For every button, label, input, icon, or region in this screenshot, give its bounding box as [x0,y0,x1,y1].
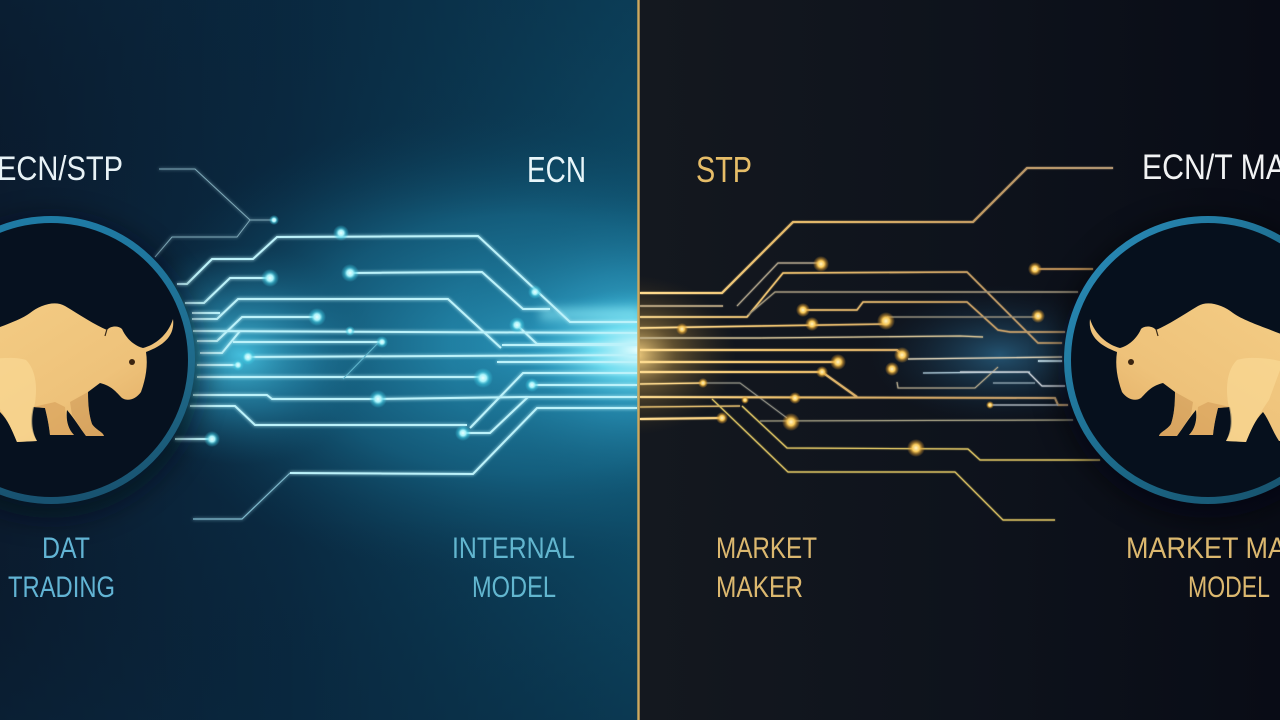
panel: right dark background [640,0,1070,720]
label: DAT TRADING: DAT [42,532,90,565]
right circle badge with bull [1058,218,1280,518]
circuit lines: right gold [640,168,1113,520]
left circle badge with bull [0,218,201,518]
icon: right bull [1090,303,1280,442]
heading: STP: STP [696,149,752,190]
label: DAT TRADING [8,532,115,604]
circuit lines: left blue [155,169,637,519]
label: MARKET MAKER [716,532,817,604]
icon: left bull [0,303,173,442]
heading: ECN/STP: ECN/STP [0,150,123,188]
divider between blue and dark panels [637,0,640,720]
glowing nodes: right gold [676,256,1045,457]
label: INTERNAL MODEL [452,532,575,604]
label: INTERNAL MODEL: INTERNAL [452,532,575,565]
glowing nodes: left blue [204,215,542,447]
heading: ECN: ECN [527,149,586,190]
label: DAT TRADING: TRADING [8,571,115,604]
panel: left blue background [0,0,638,720]
label: MARKET MAKER: MAKER [716,571,803,604]
label: MARKET MA MODEL [1126,532,1280,604]
label: INTERNAL MODEL: MODEL [472,571,556,604]
label: MARKET MAKER: MARKET [716,532,817,565]
